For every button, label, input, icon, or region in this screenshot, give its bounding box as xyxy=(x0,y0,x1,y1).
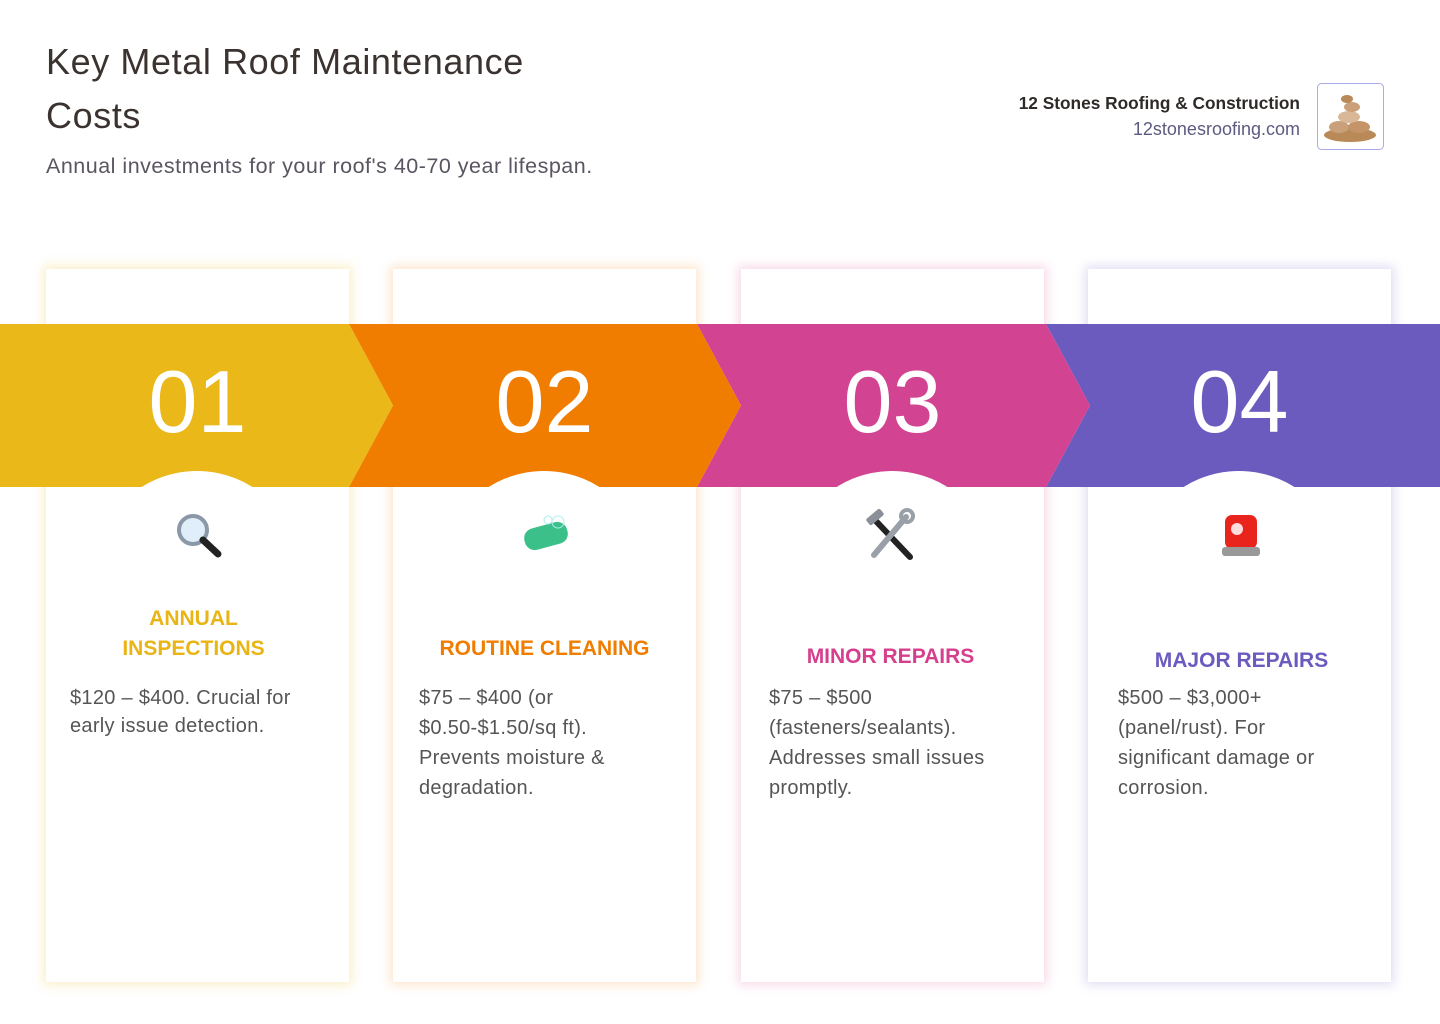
number 03: 03 xyxy=(844,352,941,451)
brand name: 12 Stones Roofing & Construction xyxy=(1019,93,1300,113)
heading: major repairs: MAJOR REPAIRS xyxy=(1155,649,1328,672)
heading: minor repairs: MINOR REPAIRS xyxy=(807,645,974,668)
text: routine cleaning: $75 – $400 (or $0.50-$1.50/sq ft). Prevents moisture & degradation. xyxy=(419,687,605,799)
card 1 xyxy=(46,269,349,982)
icon: siren xyxy=(1222,515,1260,556)
card 4 xyxy=(1088,269,1391,982)
icon: magnifier xyxy=(177,514,222,558)
text: major repairs: $500 – $3,000+ (panel/rust). For significant damage or corrosion. xyxy=(1118,687,1314,799)
arrow band xyxy=(0,324,1440,487)
text: minor repairs: $75 – $500 (fasteners/sealants). Addresses small issues promptly. xyxy=(769,687,985,799)
icon: tools xyxy=(866,508,915,560)
heading: routine cleaning: ROUTINE CLEANING xyxy=(440,637,650,660)
brand block xyxy=(1019,83,1384,150)
number 04: 04 xyxy=(1191,352,1288,451)
logo: stones xyxy=(1317,83,1384,150)
heading: annual inspections: ANNUAL xyxy=(149,607,238,630)
title xyxy=(46,41,524,136)
title: Costs xyxy=(46,95,141,136)
number 01: 01 xyxy=(149,352,246,451)
card 3 xyxy=(741,269,1044,982)
title: Key Metal Roof Maintenance xyxy=(46,41,524,82)
brand url: 12stonesroofing.com xyxy=(1133,119,1300,139)
card 2 xyxy=(393,269,696,982)
number 02: 02 xyxy=(496,352,593,451)
heading: annual inspections xyxy=(122,607,265,660)
icon: soap xyxy=(524,516,568,550)
heading: annual inspections: INSPECTIONS xyxy=(122,637,265,660)
text: annual inspections: $120 – $400. Crucial for early issue detection. xyxy=(70,687,291,737)
subtitle: Annual investments for your roof's 40-70 year lifespan. xyxy=(46,154,593,178)
